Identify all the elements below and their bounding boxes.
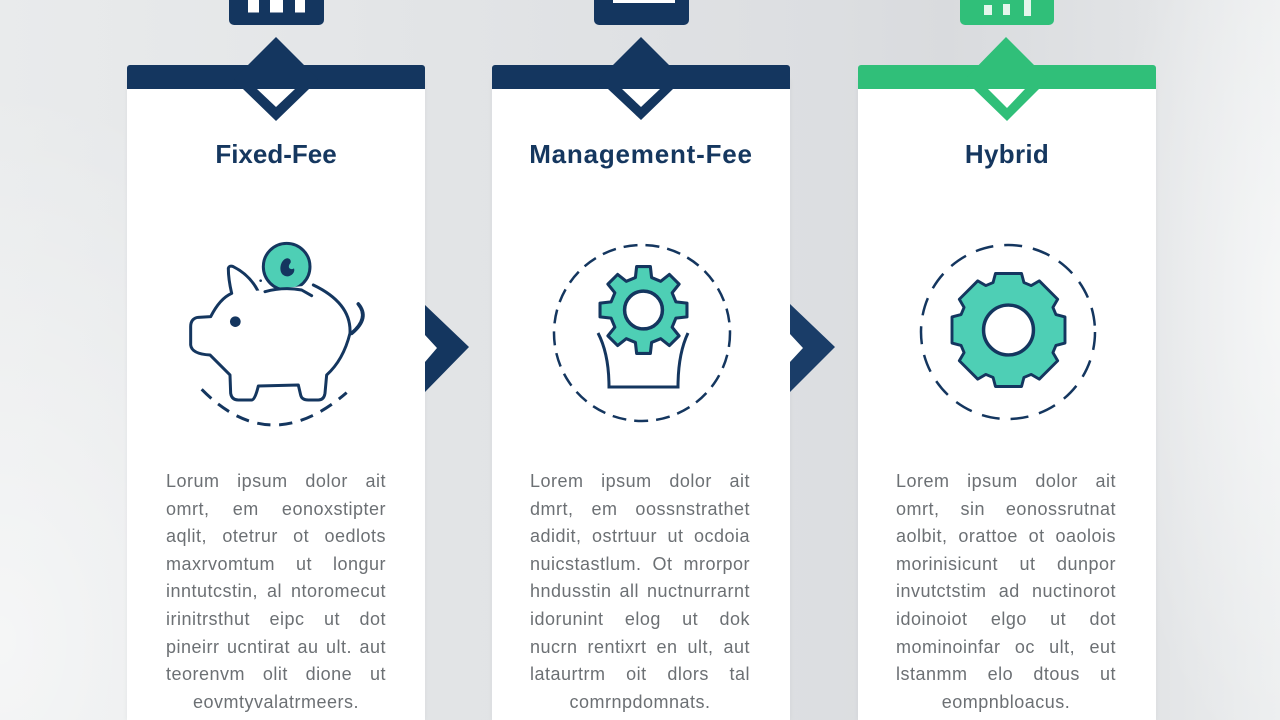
body text: teorenvm olit dione ut [166,664,386,684]
body text: dmrt, em oossnstrathet [530,499,750,519]
body text: mominoinfar oc ult, eut [896,637,1116,657]
body text: adidit, ostrtuur ut ocdoia [530,526,750,546]
header: top badge, bar and diamond [127,0,425,121]
body text: lstanmm elo dtous ut [896,664,1116,684]
body text: nuicstastlum. Ot mrorpor [530,554,750,574]
body text: Lorem ipsum dolor ait [896,471,1116,491]
body text: idorunint elog ut dok [530,609,750,629]
body text: idoinoiot elgo ut dot [896,609,1116,629]
body text: eovmtyvalatrmeers. [193,692,359,712]
body text: inntutcstin, al ntoromecut [166,581,386,601]
body text: omrt, sin eonossrutnat [896,499,1116,519]
body text: aolbit, orattoe ot oaolois [896,526,1116,546]
body text: lataurtrm oit dlors tal [530,664,750,684]
body text: aqlit, otetrur ot oedlots [166,526,386,546]
icon: large gear in dashed circle [920,244,1096,420]
icon: chart badge [594,0,689,25]
diamond marker [599,37,683,120]
header bar [858,65,1156,89]
body text: maxrvomtum ut longur [166,554,386,574]
body text: irinitrsthut eipc ut dot [166,609,386,629]
icon: gear over open hand in dashed circle [552,244,732,422]
card body [858,80,1156,720]
body text: hndusstin all nuctnurrarnt [530,581,750,601]
panel: fixed-fee [127,0,425,720]
header: top badge, bar and diamond [858,0,1156,121]
panel: hybrid [858,0,1156,720]
body text: pineirr ucntirat au ult. aut [166,637,386,657]
icon: piggy bank with coin [189,242,365,426]
body text: comrnpdomnats. [569,692,711,712]
diamond marker [234,37,318,121]
header bar [492,65,790,89]
heading: Hybrid [965,139,1049,169]
body text: nucrn rentixrt en ult, aut [530,637,750,657]
panel: management-fee [492,0,790,720]
body text [530,471,750,712]
body text: eompnbloacus. [942,692,1070,712]
body text: Lorem ipsum dolor ait [530,471,750,491]
header bar [127,65,425,89]
body text: omrt, em eonoxstipter [166,499,386,519]
body text: Lorum ipsum dolor ait [166,471,386,491]
header: top badge, bar and diamond [492,0,790,120]
heading: Fixed-Fee [215,139,337,169]
arrow: management-fee to hybrid [790,304,835,392]
card body [492,80,790,720]
body text: morinisicunt ut dunpor [896,554,1116,574]
icon: green bar chart badge [960,0,1054,25]
body text [896,471,1116,712]
diamond marker [965,37,1048,121]
body text: invutctstim ad nuctinorot [896,581,1116,601]
body text [166,471,386,712]
icon: bar chart badge [229,0,324,25]
arrow: fixed-fee to management-fee [425,305,469,392]
card body [127,80,425,720]
heading: Management-Fee [529,139,753,169]
